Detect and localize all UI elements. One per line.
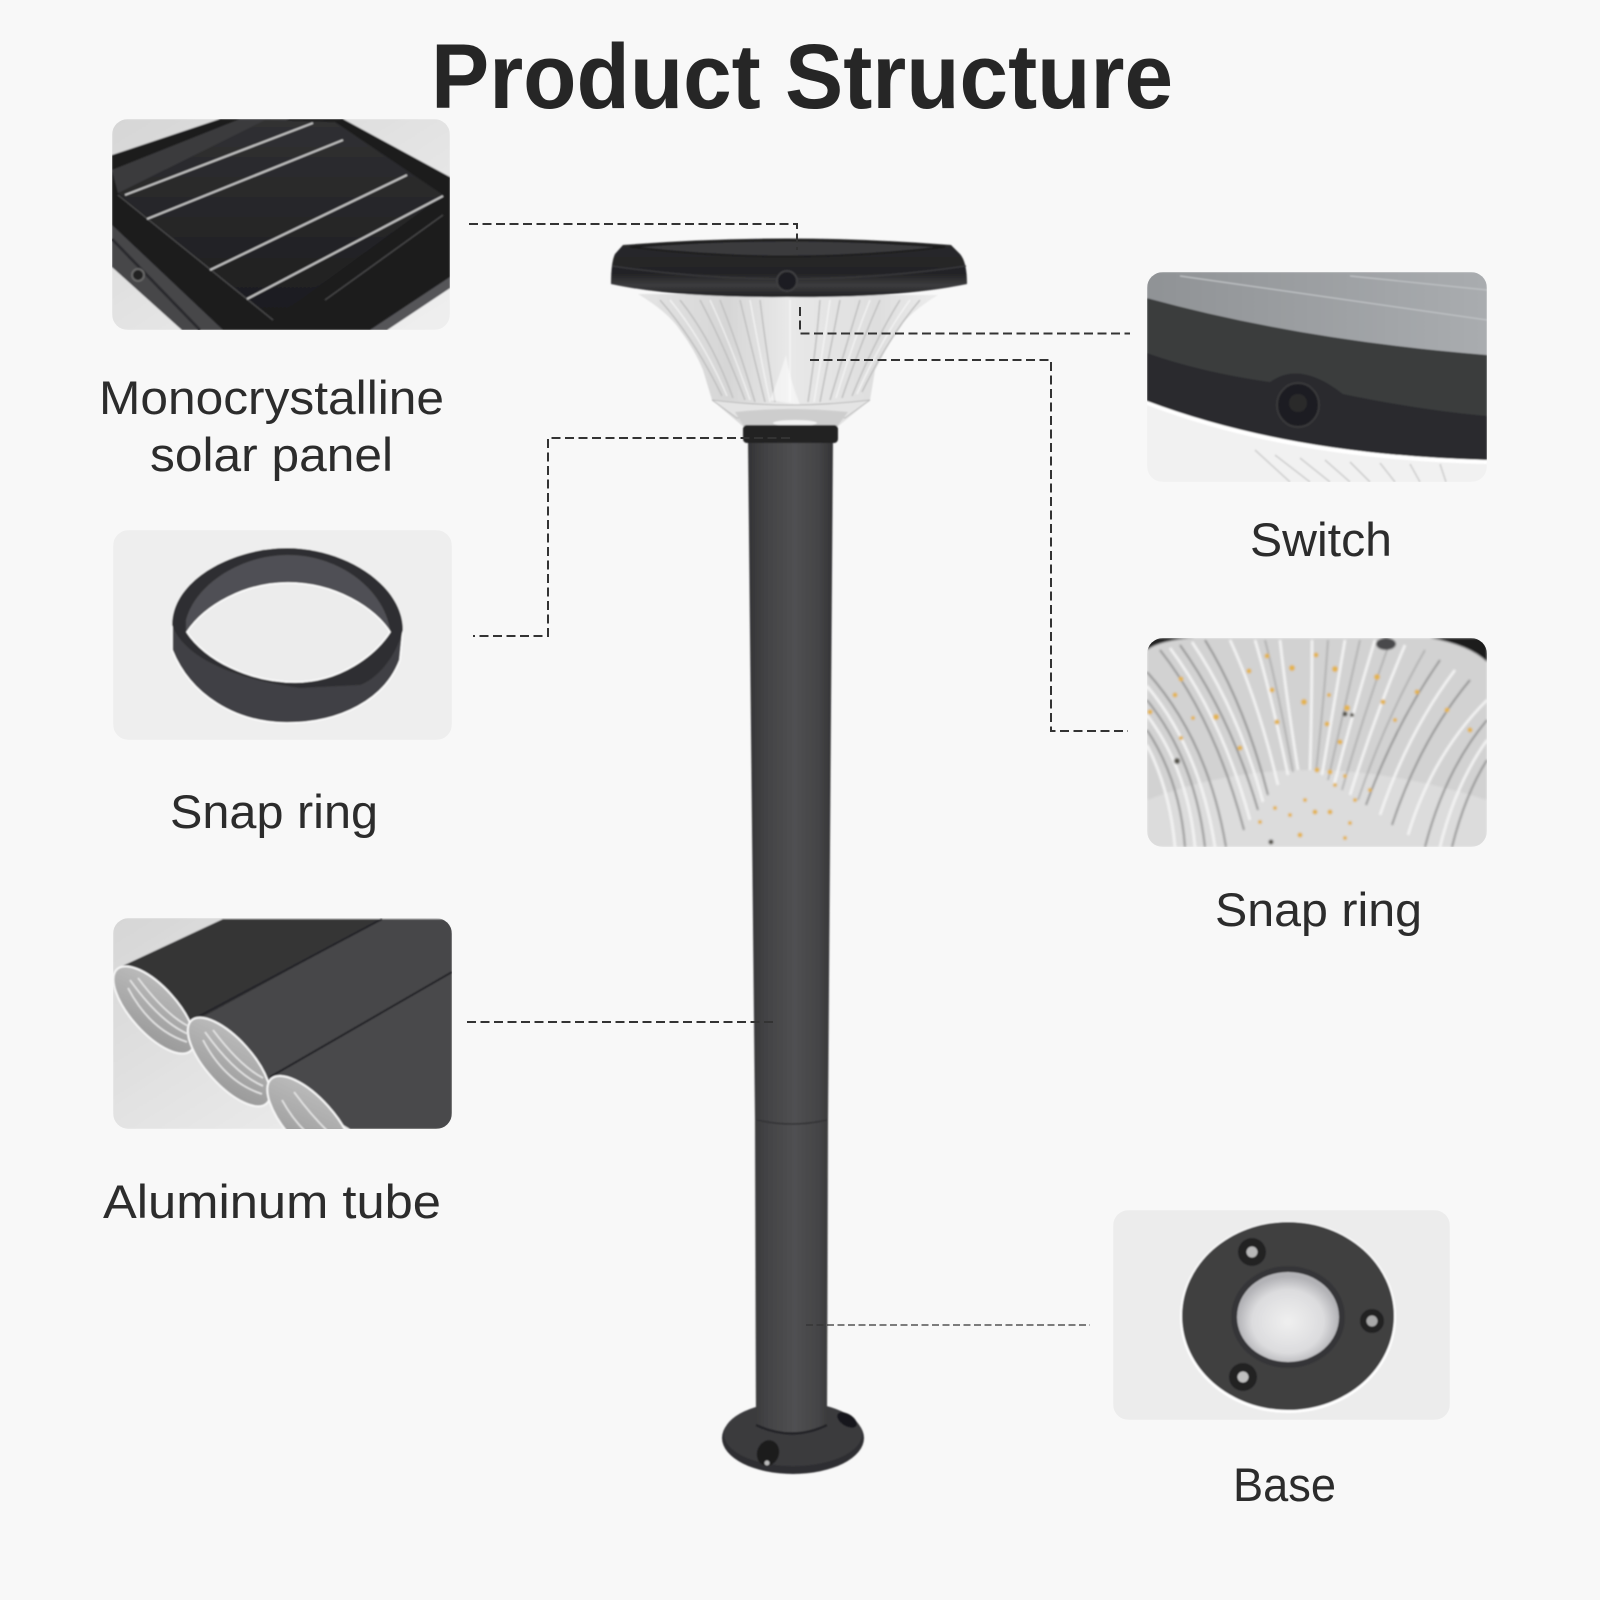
lamp product illustration (611, 238, 967, 1474)
panel: base photo (1113, 1210, 1450, 1420)
leader: switch (800, 307, 1130, 334)
title: Product Structure (431, 26, 1173, 128)
leader: base (806, 1324, 1090, 1326)
label: monocrystalline solar panel: solar panel (150, 428, 393, 481)
lamp pole (748, 438, 833, 1434)
lamp head rim with solar top (611, 238, 967, 297)
leader: snap ring on neck (473, 438, 790, 636)
tube ends with threads (113, 964, 344, 1129)
lamp switch button (777, 271, 797, 291)
label: aluminum tube: Aluminum tube (103, 1175, 441, 1228)
panel: solar panel photo (112, 119, 450, 330)
leader: aluminum tube (467, 1021, 773, 1023)
panel: snap ring photo (113, 530, 452, 740)
lamp shade (638, 294, 938, 428)
label: switch: Switch (1250, 513, 1392, 566)
panel: switch photo (1147, 272, 1487, 482)
infographic canvas (103, 42, 1487, 1502)
leader: solar panel (469, 224, 797, 250)
label: snap ring right: Snap ring (1215, 883, 1422, 936)
label: base: Base (1233, 1458, 1336, 1511)
panel: aluminum tube photo (113, 918, 452, 1129)
label: snap ring left: Snap ring (170, 785, 378, 838)
label: monocrystalline solar panel (99, 371, 444, 481)
label: monocrystalline solar panel: Monocrystalline (99, 371, 444, 424)
leader: lamp shade (810, 360, 1128, 731)
lamp base flange (722, 1402, 864, 1474)
leader lines (467, 224, 1130, 1325)
snap ring on the lamp neck (743, 425, 838, 443)
panel: LED lamp shade interior photo (1147, 638, 1487, 847)
